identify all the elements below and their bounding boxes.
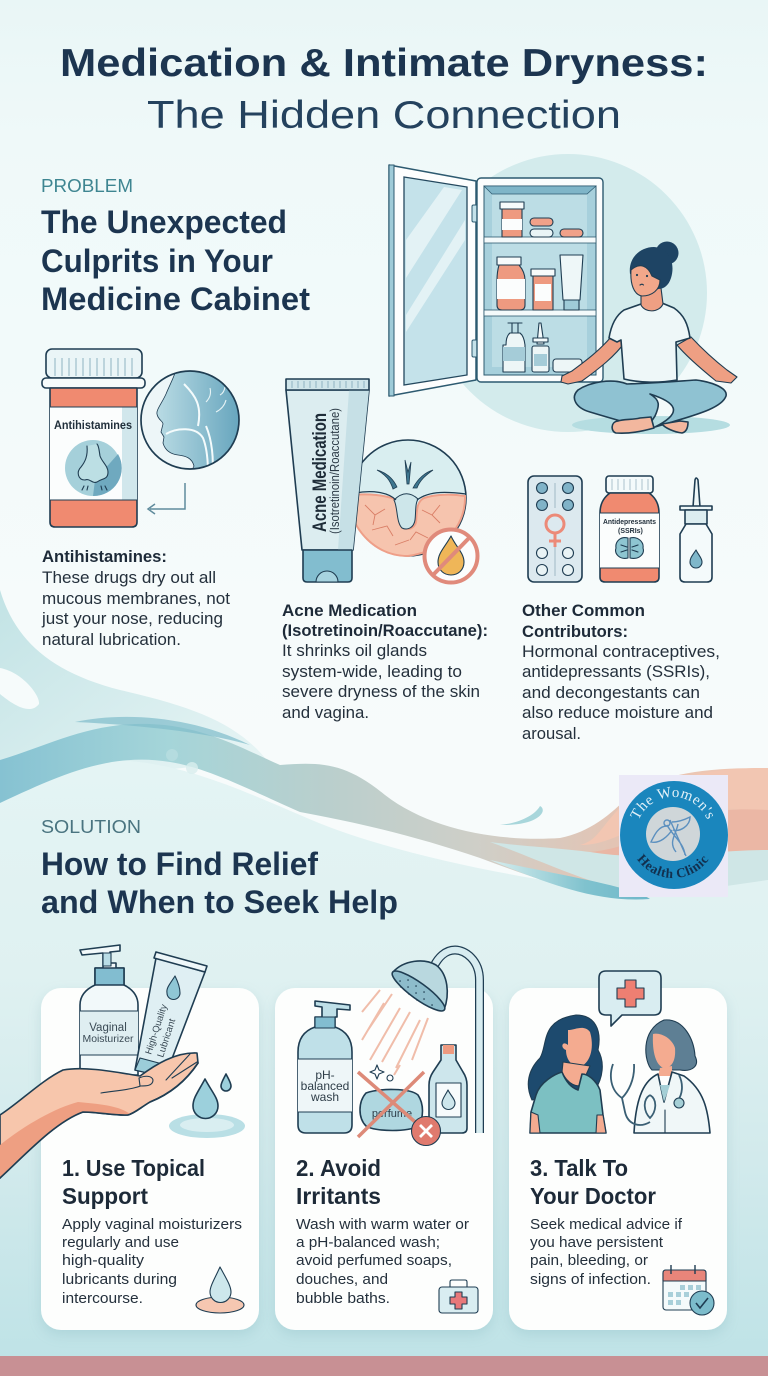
antidepressant bottle: (SSRIs)	[618, 528, 643, 535]
heading: problem: Culprits in Your	[41, 243, 273, 279]
text: antihistamines: These drugs dry out all	[42, 568, 216, 587]
logo: the women's health clinic	[619, 775, 728, 897]
cabinet door	[389, 165, 480, 396]
panel: avoid irritants	[275, 950, 493, 1330]
text: talk to your doctor: signs of infection.	[530, 1271, 651, 1288]
text: avoid irritants: Irritants	[296, 1183, 381, 1209]
icon: cleansing bottle	[429, 1045, 467, 1133]
text: acne medication: Acne Medication	[282, 601, 417, 620]
icon: bottle and tube in hand: High-Quality	[143, 1003, 170, 1056]
text: use topical support: intercourse.	[62, 1290, 143, 1307]
magnified skin circle	[350, 440, 466, 556]
text: other contributors: Hormonal contraceptives,	[522, 642, 720, 661]
icon: patient	[528, 1015, 606, 1133]
heading: problem: Medicine Cabinet	[41, 281, 310, 317]
text: antihistamines	[41, 547, 230, 649]
text: other contributors: and decongestants can	[522, 683, 700, 702]
illustration: antihistamines bottle: Antihistamines	[54, 418, 132, 432]
text: use topical support: lubricants during	[62, 1271, 177, 1288]
cabinet shelves	[477, 178, 603, 382]
icon: bottle and tube in hand: Lubricant	[155, 1017, 178, 1059]
text: talk to your doctor: 3. Talk To	[530, 1155, 628, 1181]
text: talk to your doctor: Your Doctor	[530, 1183, 656, 1209]
text: avoid irritants: a pH-balanced wash;	[296, 1234, 440, 1251]
text: other contributors: arousal.	[522, 724, 581, 743]
text: acne medication: severe dryness of the skin	[282, 682, 480, 701]
antidepressant bottle	[600, 476, 659, 582]
text: use topical support: high-quality	[62, 1252, 144, 1269]
title	[60, 42, 708, 137]
icon: ph-balanced wash bottle	[298, 1001, 352, 1133]
illustration: medicine cabinet and woman	[389, 154, 737, 434]
illustration: acne medication tube: (Isotretinoin/Roaccutane)	[328, 408, 342, 534]
text: talk to your doctor	[530, 1155, 683, 1288]
text: avoid irritants	[296, 1155, 469, 1307]
icon: speech bubble with cross	[599, 971, 661, 1026]
text: use topical support: Support	[62, 1183, 148, 1209]
icon: red cross-out badge	[412, 1116, 440, 1146]
panel: use topical support	[0, 945, 259, 1330]
text: avoid irritants: bubble baths.	[296, 1290, 390, 1307]
icon: bottle and tube in hand	[0, 945, 207, 1178]
illustration: acne medication tube: Acne Medication	[309, 413, 331, 532]
icon: doctor	[611, 1020, 710, 1133]
text: acne medication: (Isotretinoin/Roaccutane):	[282, 621, 488, 640]
icon: crossed soap	[358, 1065, 424, 1137]
illustration: acne medication tube	[286, 379, 478, 582]
antidepressant bottle: Antidepressants	[603, 517, 656, 526]
title: The Hidden Connection	[147, 94, 621, 137]
text: acne medication: system-wide, leading to	[282, 662, 462, 681]
icon: bottle and tube in hand: Moisturizer	[82, 1033, 134, 1045]
icon: ph-balanced wash bottle: wash	[310, 1090, 339, 1104]
woman meditating	[561, 242, 737, 434]
icon: droplets and ripple	[169, 1074, 245, 1138]
no oil icon	[424, 530, 478, 582]
icon: bottle and tube in hand: Vaginal	[89, 1022, 127, 1034]
text: use topical support: 1. Use Topical	[62, 1155, 205, 1181]
text: avoid irritants: avoid perfumed soaps,	[296, 1252, 452, 1269]
heading: solution	[41, 817, 398, 920]
heading: problem: PROBLEM	[41, 176, 133, 196]
icon: drop on base	[196, 1267, 244, 1313]
footer band	[0, 1356, 768, 1376]
contraceptive blister pack	[528, 476, 582, 582]
heading: solution: and When to Seek Help	[41, 884, 398, 920]
text: avoid irritants: douches, and	[296, 1271, 388, 1288]
panel: talk to your doctor	[509, 971, 727, 1330]
icon: crossed soap: perfume	[372, 1108, 412, 1120]
text: antihistamines: natural lubrication.	[42, 630, 181, 649]
icon: calendar with check	[663, 1265, 714, 1315]
text: antihistamines: Antihistamines:	[42, 547, 167, 566]
text: use topical support: regularly and use	[62, 1234, 179, 1251]
icon: shower	[362, 950, 480, 1133]
text: other contributors: antidepressants (SSRIs),	[522, 662, 710, 681]
title: Medication & Intimate Dryness:	[60, 42, 708, 85]
text: antihistamines: just your nose, reducing	[41, 609, 223, 628]
heading: solution: SOLUTION	[41, 817, 141, 837]
text: avoid irritants: Wash with warm water or	[296, 1216, 469, 1233]
heading: solution: How to Find Relief	[41, 846, 318, 882]
heading: problem	[41, 176, 310, 317]
nasal spray	[680, 478, 712, 582]
illustration: other contributors	[528, 476, 712, 582]
text: talk to your doctor: you have persistent	[530, 1234, 664, 1251]
text: avoid irritants: 2. Avoid	[296, 1155, 381, 1181]
icon: ph-balanced wash bottle: pH-	[315, 1068, 335, 1082]
text: other contributors: Contributors:	[522, 622, 628, 641]
text: talk to your doctor: pain, bleeding, or	[530, 1252, 648, 1269]
illustration: antihistamines bottle	[42, 349, 245, 527]
logo: the women's health clinic: The Women's	[630, 786, 713, 819]
icon: ph-balanced wash bottle: balanced	[301, 1079, 349, 1093]
heading: problem: The Unexpected	[41, 204, 287, 240]
text: antihistamines: mucous membranes, not	[42, 589, 230, 608]
arrow	[148, 483, 185, 514]
logo: the women's health clinic: Health Clinic	[636, 854, 708, 878]
text: use topical support	[62, 1155, 242, 1307]
text: other contributors: also reduce moisture and	[522, 703, 713, 722]
text: use topical support: Apply vaginal moisturizers	[62, 1216, 242, 1233]
text: other contributors	[522, 601, 720, 743]
text: acne medication	[282, 601, 488, 722]
text: acne medication: and vagina.	[282, 703, 369, 722]
magnified throat circle	[140, 370, 240, 470]
icon: first aid kit	[439, 1280, 478, 1313]
text: acne medication: It shrinks oil glands	[282, 641, 427, 660]
text: other contributors: Other Common	[522, 601, 645, 620]
text: talk to your doctor: Seek medical advice if	[530, 1216, 683, 1233]
